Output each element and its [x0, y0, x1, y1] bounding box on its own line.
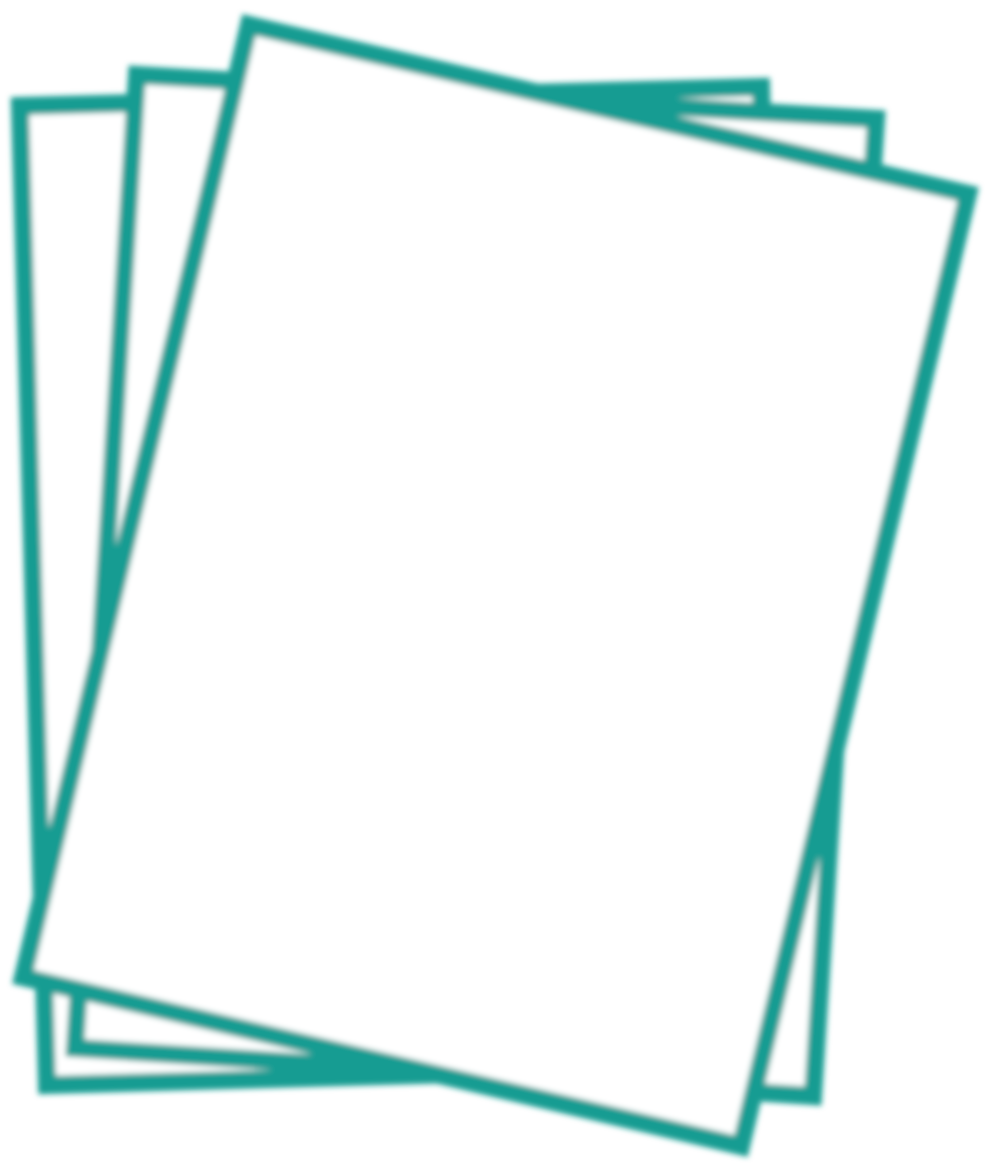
- middle sheet tilted clockwise: [75, 75, 876, 1096]
- back sheet tilted counter-clockwise: [20, 87, 790, 1085]
